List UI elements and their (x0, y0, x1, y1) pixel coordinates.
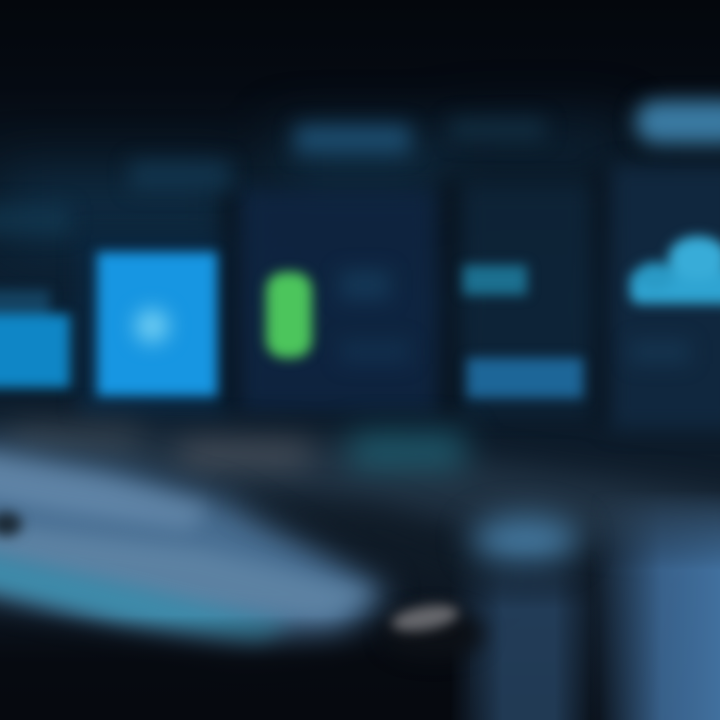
panel: blue bar (467, 358, 583, 398)
icon: glowing cloud (630, 236, 720, 304)
desk dark band (230, 500, 500, 600)
background glow (0, 120, 620, 250)
panel: bright blue screen (97, 252, 217, 396)
keyboard keys highlight (0, 520, 375, 620)
keyboard (0, 445, 390, 650)
mouse (384, 600, 484, 658)
keyboard body (0, 445, 390, 650)
icon: green battery (266, 272, 312, 358)
desk reflections (0, 420, 720, 560)
headings: blurred monitor header text (0, 118, 690, 364)
desk dark foreground (0, 615, 470, 720)
panel: dark monitors (80, 165, 720, 430)
mouse highlight (389, 600, 461, 636)
blue glow: bottom right (590, 490, 720, 720)
panel: left bright screen (0, 290, 70, 388)
keyboard front edge (0, 550, 290, 645)
icon: top right cloud shape (635, 100, 720, 144)
panel: teal label (463, 265, 527, 295)
icon: central glow (135, 309, 169, 343)
blue glow: centre right desk (450, 516, 600, 720)
dark gap on keyboard (0, 512, 22, 536)
keyboard upper light (0, 450, 210, 530)
